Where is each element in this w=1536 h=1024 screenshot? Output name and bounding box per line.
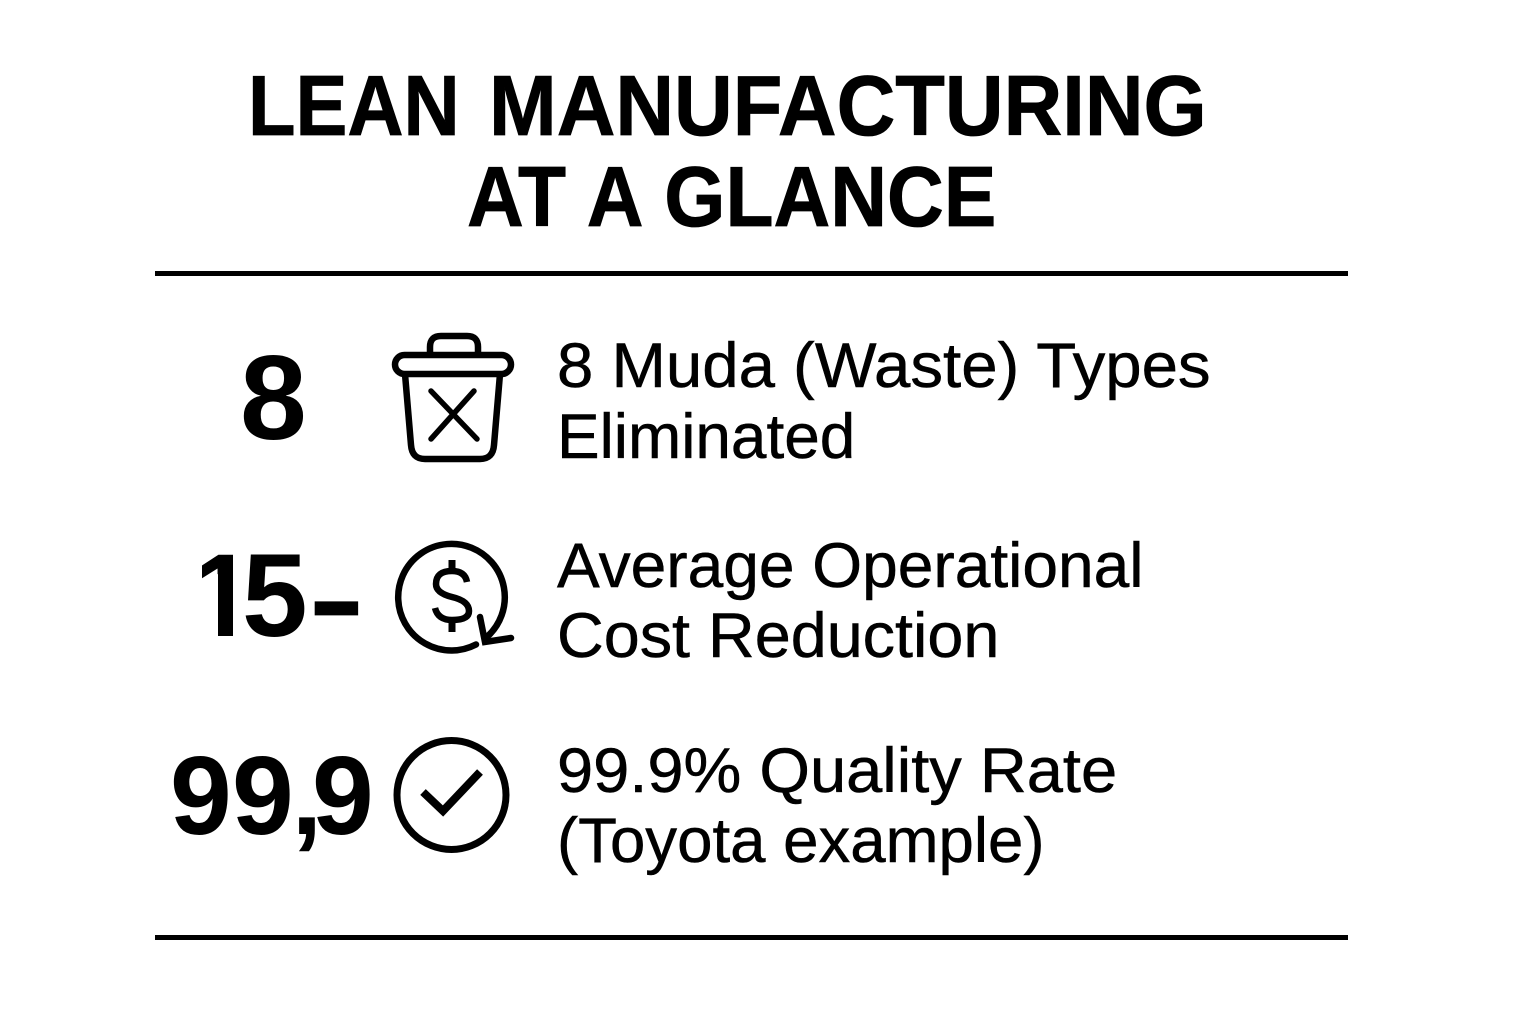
description: cost: Cost Reduction [557, 601, 999, 671]
statistic: 15-: 1 [190, 530, 256, 662]
statistic: 15- [202, 530, 365, 665]
description: muda: Eliminated [557, 402, 855, 472]
statistic: 15-: - [308, 533, 365, 665]
description: quality [557, 736, 1117, 876]
description: muda [557, 331, 1211, 472]
description: muda: 8 Muda (Waste) Types [557, 331, 1211, 401]
title: AT A GLANCE [467, 150, 996, 245]
statistic: 99,9: 99,9 [170, 734, 374, 858]
statistic: 15-: 5 [242, 530, 308, 662]
description: cost [556, 531, 1144, 671]
description: cost: Average Operational [557, 531, 1144, 601]
description: quality: 99.9% Quality Rate [557, 736, 1117, 806]
title: LEAN [248, 59, 460, 154]
title: MANUFACTURING [489, 59, 1207, 154]
description: quality: (Toyota example) [557, 806, 1045, 876]
title [248, 59, 1207, 245]
statistic: 8: 8 [240, 331, 307, 465]
